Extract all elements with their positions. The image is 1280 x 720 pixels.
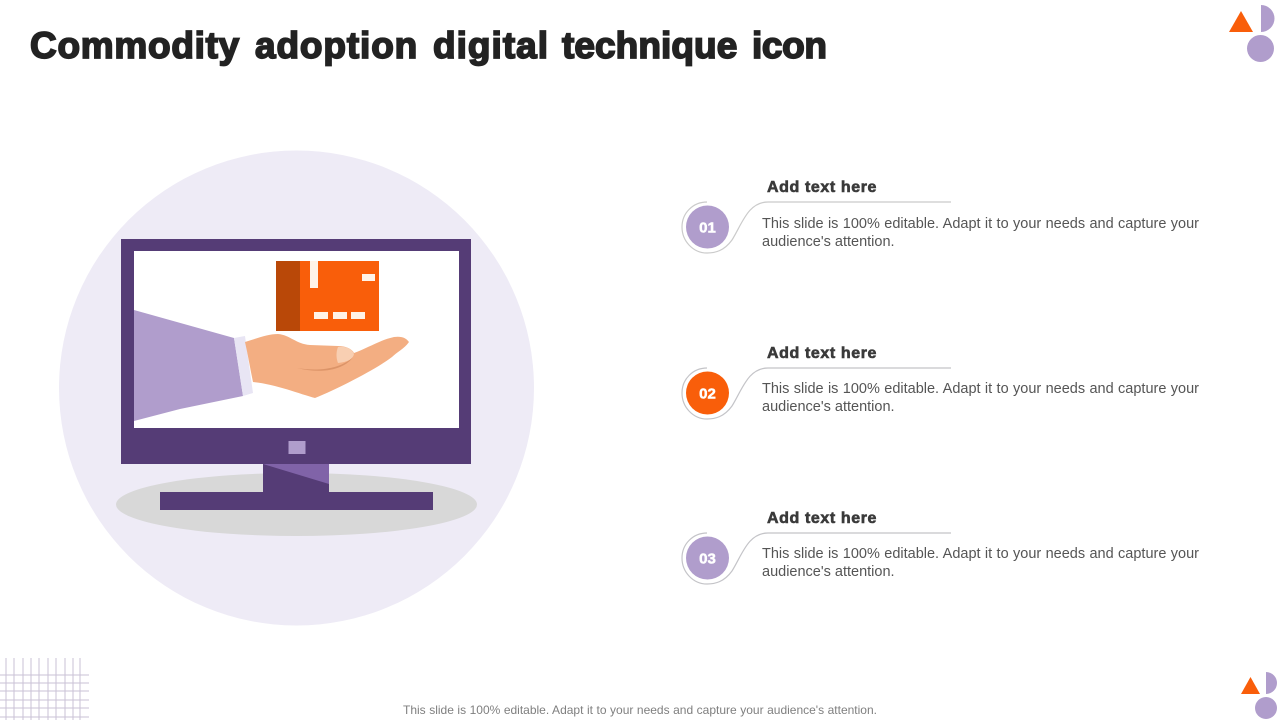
number badge 02: [681, 367, 951, 420]
number badge 03: [681, 532, 951, 585]
body text 01: audience's attention.: [762, 234, 895, 250]
body text 02: [762, 381, 1199, 415]
title: icon: [752, 25, 827, 66]
title: adoption: [255, 25, 418, 66]
body text 03: [762, 546, 1199, 580]
decorative shapes: bottom right: [1241, 672, 1277, 719]
body text 01: [762, 216, 1199, 250]
heading 03: Add text here: [767, 510, 877, 527]
number badge 03: 03: [699, 550, 716, 568]
monitor body: [121, 239, 471, 464]
item 01: [681, 179, 1199, 254]
item 02: [681, 345, 1199, 420]
number badge 01: 01: [699, 220, 716, 236]
body text 01: This slide is 100% editable. Adapt it to your needs and capture your: [762, 216, 1199, 232]
decorative shapes: top right: [1229, 5, 1274, 62]
item 03: [681, 510, 1199, 585]
monitor button: [288, 441, 306, 454]
title: [30, 25, 827, 66]
monitor shadow: [116, 473, 477, 536]
decorative grid: bottom left: [0, 658, 89, 720]
monitor screen: [134, 251, 459, 428]
hand: [245, 334, 409, 398]
title: technique: [562, 25, 737, 66]
cuff: [234, 336, 253, 396]
body text 02: audience's attention.: [762, 399, 895, 415]
monitor stand: [160, 463, 433, 510]
number badge 02: 02: [699, 386, 716, 402]
title: digital: [433, 25, 549, 66]
title: Commodity: [30, 25, 240, 66]
illustration: monitor with hand holding a package: [59, 150, 534, 626]
footer note: This slide is 100% editable. Adapt it to your needs and capture your audience's attention.: [403, 703, 877, 717]
number badge 01: [681, 201, 951, 254]
body text 03: This slide is 100% editable. Adapt it to your needs and capture your: [762, 546, 1199, 562]
heading 02: Add text here: [767, 345, 877, 362]
package box: [276, 261, 379, 331]
body text 03: audience's attention.: [762, 564, 895, 580]
heading 01: Add text here: [767, 179, 877, 196]
body text 02: This slide is 100% editable. Adapt it to your needs and capture your: [762, 381, 1199, 397]
background circle: [59, 150, 534, 626]
sleeve: [134, 310, 243, 421]
